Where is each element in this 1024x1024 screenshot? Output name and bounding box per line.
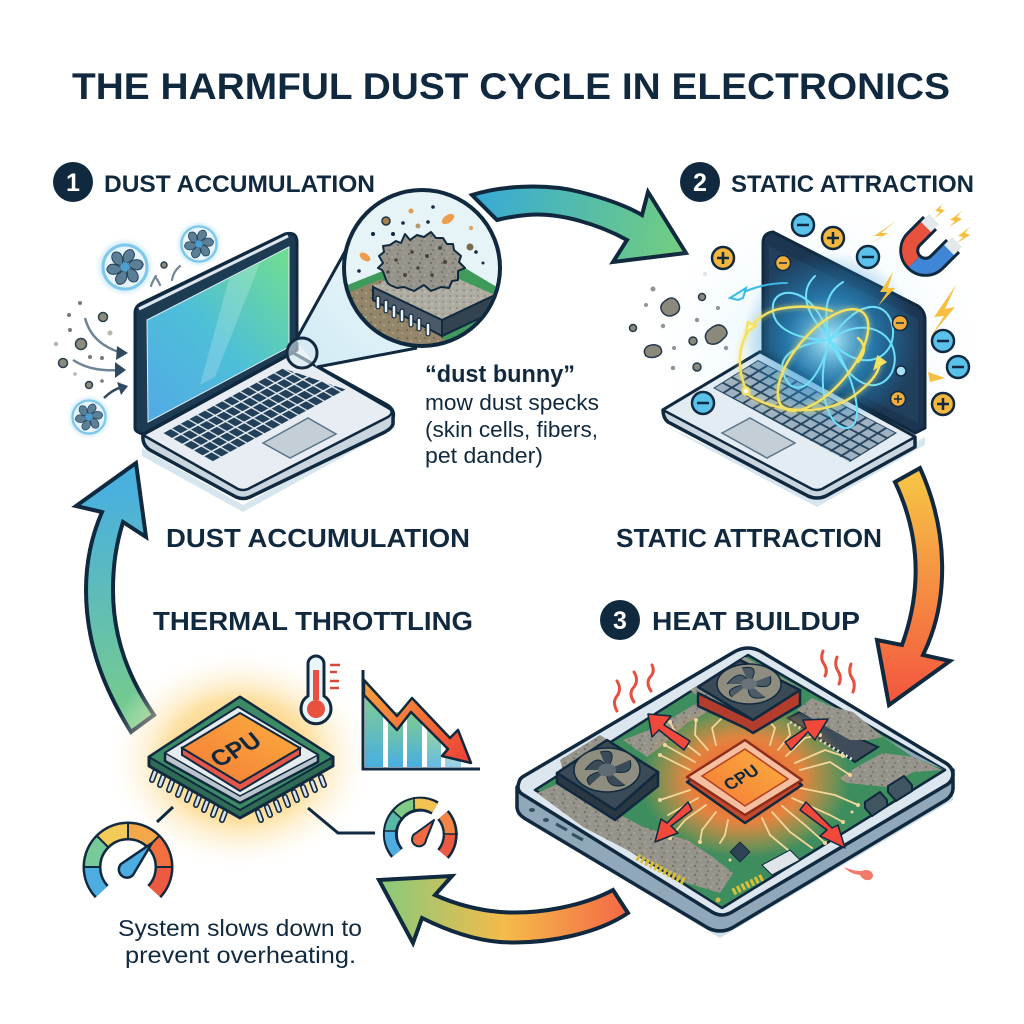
lightning bolts: [870, 204, 970, 382]
lens cone: [296, 250, 417, 367]
zoom target circle: [287, 338, 317, 368]
chart: falling performance: [363, 670, 480, 769]
badge 3: [600, 600, 640, 640]
panel: magnifier on dust bunny: [287, 184, 510, 368]
laptop lid: [763, 232, 925, 433]
badge 3 number: 3: [613, 607, 627, 635]
charges: plus: [712, 227, 954, 415]
memory chip pins: [790, 722, 853, 760]
screen glow: [742, 252, 918, 428]
icon: small gauge: [383, 797, 458, 854]
chassis top rim: [518, 648, 953, 915]
heat waves: left: [614, 665, 653, 711]
step 2 heading: [680, 162, 974, 202]
dust particles drifting in: [54, 262, 180, 388]
soft glow: [640, 190, 1000, 490]
laptop deck: [663, 352, 915, 490]
arrows: dust drawn in: [73, 318, 128, 398]
caption line 3: pet dander): [425, 443, 543, 468]
board shadow: [517, 790, 953, 938]
yellow static orbits: [740, 295, 885, 425]
small components: [730, 842, 800, 875]
caption heading: “dust bunny”: [425, 361, 575, 388]
caption line 2: prevent overheating.: [125, 942, 356, 968]
step 3 heading: [600, 600, 860, 640]
chassis ports: [529, 808, 583, 840]
gold contacts: [637, 857, 763, 892]
heat drip: [844, 867, 873, 880]
cpu pins: [152, 772, 324, 820]
keyboard: [162, 368, 347, 462]
exposed chassis floor: [883, 737, 945, 770]
board traces: [660, 718, 858, 850]
heat waves: right: [822, 651, 854, 692]
step 2 label: STATIC ATTRACTION: [731, 171, 974, 198]
cpu die side: [182, 748, 300, 791]
cpu label: CPU: [719, 761, 763, 794]
laptop base: [663, 352, 915, 498]
static field lines: [730, 276, 895, 428]
laptop shadow: [663, 425, 925, 507]
dust clumps: [630, 272, 728, 371]
badge 1 number: 1: [66, 169, 80, 197]
cycle label: dust accumulation: DUST ACCUMULATION: [166, 523, 470, 553]
arrow: accumulation to static: [472, 187, 686, 262]
panel: dust accumulation laptop: [54, 223, 395, 512]
keyboard: [713, 360, 897, 462]
dust bunny caption: [425, 361, 599, 468]
arrow: throttling to accumulation: [76, 463, 154, 732]
cycle label: static attraction: STATIC ATTRACTION: [616, 523, 882, 553]
laptop base: [143, 353, 393, 498]
cpu glow: [105, 648, 375, 872]
yellow glow: [740, 295, 884, 425]
icon: large gauge: [83, 822, 173, 892]
cone edges: [296, 248, 417, 367]
badge 2 number: 2: [693, 169, 707, 197]
circuit board: [535, 655, 945, 908]
icon: magnet: [909, 219, 957, 267]
charges on screen: [776, 256, 908, 406]
icon: thermometer: [301, 656, 340, 724]
trackpad: [263, 418, 336, 458]
arrows: heat radiating: [648, 714, 845, 848]
lid highlight: [139, 236, 288, 309]
lens rim: [344, 190, 500, 346]
magnified view: [348, 192, 498, 344]
caption line 1: System slows down to: [118, 915, 362, 941]
panel: thermal throttling cpu: [105, 648, 375, 872]
cpu top substrate: [149, 697, 333, 810]
heat spreader: [165, 707, 318, 803]
charges: minus: [692, 214, 969, 414]
badge 1: [53, 162, 93, 202]
memory chip: [788, 712, 878, 762]
badge 2: [680, 162, 720, 202]
sockets: [865, 776, 912, 816]
fan: top: [698, 660, 800, 733]
cpu die label: CPU: [205, 728, 267, 773]
chart bars: [365, 690, 461, 767]
laptop deck: [143, 353, 392, 490]
cpu die: [182, 713, 300, 783]
arrow: heat to throttling: [379, 876, 628, 943]
arrow: static to heat: [877, 468, 950, 705]
step 1 label: DUST ACCUMULATION: [104, 171, 375, 198]
chassis side: [517, 770, 953, 931]
cpu heat glow: [640, 702, 850, 858]
trace pads: [658, 718, 860, 902]
fan: left: [557, 740, 658, 820]
thermal throttling heading: THERMAL THROTTLING: [153, 606, 473, 636]
screen glare: [200, 263, 260, 385]
chart trend arrow: [364, 680, 471, 763]
step 3 label: HEAT BUILDUP: [652, 606, 860, 636]
throttling caption: [118, 915, 362, 968]
cpu substrate: [149, 697, 333, 818]
panel: static attraction laptop: [630, 190, 1000, 507]
laptop lid: [135, 233, 297, 434]
laptop screen: [147, 247, 289, 422]
caption line 2: (skin cells, fibers,: [425, 417, 598, 442]
cpu chip: [687, 740, 802, 823]
title: THE HARMFUL DUST CYCLE IN ELECTRONICS: [72, 66, 950, 107]
laptop screen: [769, 246, 918, 423]
connector lines: [157, 807, 375, 833]
step 1 heading: [53, 162, 375, 202]
lens halo: [338, 184, 506, 352]
trackpad: [722, 418, 795, 458]
laptop shadow: [142, 420, 395, 512]
icon: fans: [70, 223, 220, 436]
dust deposits: [537, 657, 942, 893]
panel: heat buildup motherboard: [517, 648, 953, 938]
infographic canvas: [53, 73, 972, 968]
chart axes: [363, 670, 480, 769]
caption line 1: mow dust specks: [425, 390, 599, 415]
